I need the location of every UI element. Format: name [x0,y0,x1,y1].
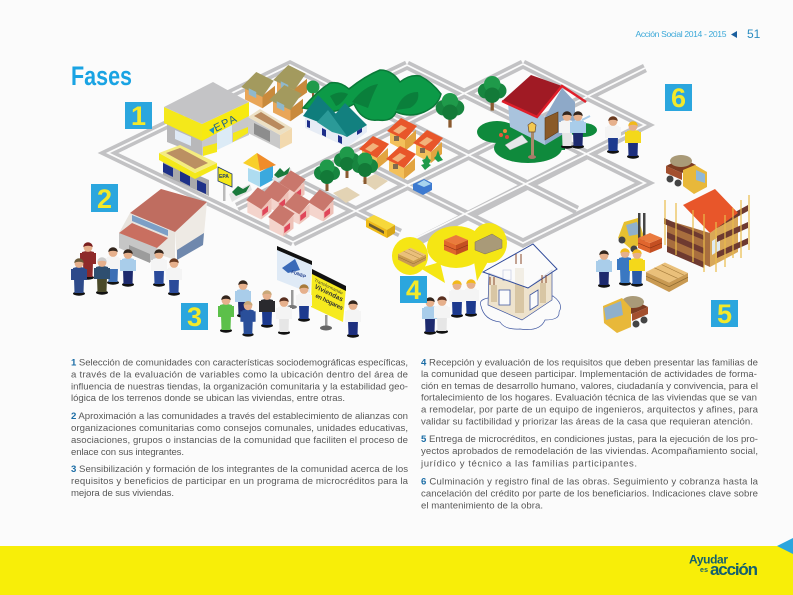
title: Fases [71,61,132,91]
EPA sign: EPA [219,174,229,180]
paragraph 4: ción en temas de desarrollo humano, valores, ciudadanía y convivencia, para el [421,381,758,392]
people group [559,111,641,159]
paragraph 5: jurídico y técnico a las familias participantes. [420,458,637,470]
people group [218,280,361,338]
badge 2: 2 [97,184,112,214]
paragraph 2 [71,411,408,458]
paragraph 6: cancelación del crédito por parte de los beneficiarios. Indicaciones clave sobre [421,488,758,500]
teal houses [303,95,367,147]
footer yellow band [0,546,793,595]
phase 5: microcredit and construction [596,155,749,333]
green mountains [303,70,441,120]
forklift and bricks [618,213,662,253]
lumber stack [646,263,688,292]
text column right [420,358,759,512]
billboard right: Transformando [314,277,344,296]
tree [478,76,506,111]
orange houses [359,118,443,179]
phase 6: finished house [436,75,641,163]
paragraph 6: el mantenimiento de la obra. [421,500,543,512]
paragraph 4: 4 Recepción y evaluación de los requisitos que deben presentar las familias de [421,358,758,368]
billboard right: Viviendas [313,284,344,304]
paragraph 5 [420,434,758,470]
billboard right: en hogares [314,293,344,312]
building under construction [664,189,749,272]
paragraph 2: enlace con sus integrantes. [71,447,184,458]
speech bubbles with materials [392,223,507,283]
badge 6 [665,83,692,113]
logo: Ayudar es acción: es [700,567,708,574]
EPA main building: EPA [212,113,239,135]
paragraph 1: a través de la evaluación de variables como la ubicación dentro del área de [71,370,408,380]
paragraph 2: 2 Aproximación a las comunidades a través del establecimiento de alianzas con [71,411,408,422]
front store [159,145,217,196]
badge 4 [400,275,427,305]
annex building [248,109,292,149]
badge 5: 5 [717,299,732,329]
logo: Ayudar es acción: acción [710,560,758,579]
badge 1: 1 [131,101,146,131]
paragraph 6: 6 Culminación y registro final de las obras. Seguimiento y cobranza hasta la [421,476,759,488]
paragraph 6 [421,476,759,512]
badge 1 [125,101,152,131]
phase 4: requirements and house evaluation [392,223,561,335]
EPA main building [164,82,249,156]
blue van [413,179,432,195]
people group [71,242,182,296]
paragraph 1: 1 Selección de comunidades con características sociodemográficas específicas, [71,358,408,368]
paragraph 3: 3 Sensibilización y formación de los integrantes de la comunidad acerca de los [71,464,408,475]
road network [108,64,645,317]
paragraph 2: asociaciones, grupos o instancias de la comunidad que faciliten el proceso de [71,435,408,446]
garden [477,121,597,163]
house with red roof [502,75,586,145]
paragraph 3: mejora de sus viviendas. [71,488,174,499]
trees [314,146,443,191]
paragraph 5: 5 Entrega de microcréditos, en condiciones justas, para la ejecución de los pro- [421,434,758,445]
paragraph 3: requisitos y beneficios de participar en un programa de microcréditos para la [71,476,409,487]
billboard left: FUNEP [291,269,307,279]
badge 3 [181,302,208,332]
badge 2 [91,184,118,214]
house under evaluation [480,244,561,330]
paragraph 3 [71,464,409,499]
header: publication name and page number: 51 [747,27,761,41]
lamp, bench and flowers [499,122,536,159]
paragraph 4: a remodelar, por parte de un equipo de ingenieros, arquitectos y afines, para [421,404,759,416]
header: publication name and page number [636,27,761,41]
pink houses [246,170,335,237]
yellow bus [366,215,395,238]
text column left [71,358,409,499]
kiosk and planters [229,153,292,202]
paragraph 2: organizaciones comunitarias como consejos comunales, unidades educativas, [71,423,408,434]
second tree [436,93,464,128]
badge 4: 4 [406,275,421,305]
EPA sign [218,167,232,201]
people group [422,279,479,335]
paragraph 4 [421,358,759,428]
bottom truck [603,296,648,333]
people group [596,248,645,288]
billboard left [277,246,312,309]
paragraph 4: validar su factibilidad y priorizar las áreas de la casa que requieran atención. [421,416,753,428]
phase 2: community meeting at warehouse [71,189,207,296]
billboard right [311,269,346,330]
paragraph 1: influencia de nuestras tiendas, la organización comunitaria y la estabilidad geo- [71,381,408,392]
tan houses [241,65,320,121]
logo: Ayudar es acción [689,552,758,579]
footer blue triangle [777,538,793,554]
logo: Ayudar es acción: Ayudar [689,552,728,566]
paragraph 4: fortalecimiento de los hogares. Evaluación técnica de las viviendas que se van [421,392,757,404]
paragraph 5: yectos aprobados de remodelación de las viviendas. Acompañamiento social, [421,446,758,457]
badge 6: 6 [671,83,686,113]
construction foundations [333,174,388,203]
badge 5 [711,299,738,329]
paragraph 1: lógica de los terrenos donde se ubican las viviendas, entre otras. [71,393,345,404]
paragraph 4: la comunidad que deseen participar. Implementación de actividades de forma- [421,369,757,380]
badge 3: 3 [187,302,202,332]
header: publication name and page number: Acción Social 2014 - 2015 [636,29,727,39]
top truck [666,155,707,194]
phase 3: awareness and training [218,246,361,338]
paragraph 1 [71,358,408,404]
phase 1: EPA store and community [159,65,443,238]
warehouse [119,189,207,265]
